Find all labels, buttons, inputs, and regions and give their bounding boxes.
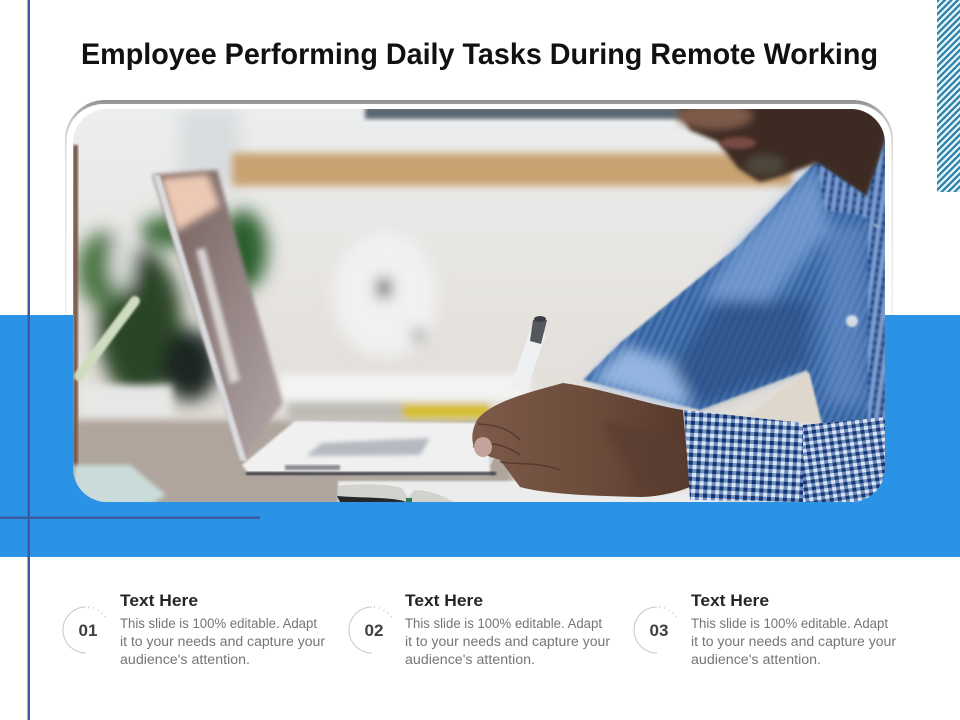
body 03: audience's attention. [691,652,821,667]
body 01: it to your needs and capture your [120,634,326,649]
laptop base [242,421,496,475]
table [73,420,513,510]
body 01: audience's attention. [120,652,250,667]
body 01: This slide is 100% editable. Adapt [120,616,317,631]
sleeve [803,417,885,505]
heading 01: Text Here [120,592,198,610]
title: Employee Performing Daily Tasks During Remote Working [81,38,878,71]
blurred globe [333,233,437,357]
image frame [65,100,893,315]
photo: person writing at a laptop [73,102,890,510]
wall [73,109,885,502]
dark ceiling strip [365,106,685,119]
wall gap between arm and torso [745,372,822,424]
table top right [338,481,718,506]
item 01 [63,592,326,667]
heading 03: Text Here [691,592,769,610]
number 01: 01 [79,621,97,640]
lamp post [73,145,78,490]
body 02: audience's attention. [405,652,535,667]
shirt placket [868,140,885,425]
face and neck [677,102,890,197]
item 03 [634,592,897,667]
number ring 02 [349,607,392,653]
vertical accent line [28,0,30,720]
laptop screen [153,170,283,462]
shirt torso [583,130,885,425]
shirt buttons [846,217,883,327]
collar [817,143,885,230]
item 02 [349,592,611,667]
number 02: 02 [365,621,383,640]
checked cuff [684,410,803,502]
left wall shade [180,109,240,189]
wooden shelf [232,153,792,186]
white books and yellow stripe [280,374,530,420]
number ring 01 [63,607,106,653]
pale teal glass base [73,465,166,505]
body 03: it to your needs and capture your [691,634,897,649]
body 02: This slide is 100% editable. Adapt [405,616,602,631]
heading 02: Text Here [405,592,483,610]
body 01 [120,616,326,667]
blue band [0,315,960,557]
number ring 03 [634,607,677,653]
white pot area [80,385,172,419]
notebook [337,484,454,502]
shirt highlights [590,165,865,410]
body 02 [405,616,611,667]
hand [472,383,690,497]
number 03: 03 [650,621,668,640]
plant [77,210,267,401]
corner stripe pattern [937,0,960,192]
pale green stalk [79,301,135,376]
horizontal accent line [0,516,260,519]
pen [489,316,547,468]
body 03: This slide is 100% editable. Adapt [691,616,888,631]
body 03 [691,616,897,667]
body 02: it to your needs and capture your [405,634,611,649]
